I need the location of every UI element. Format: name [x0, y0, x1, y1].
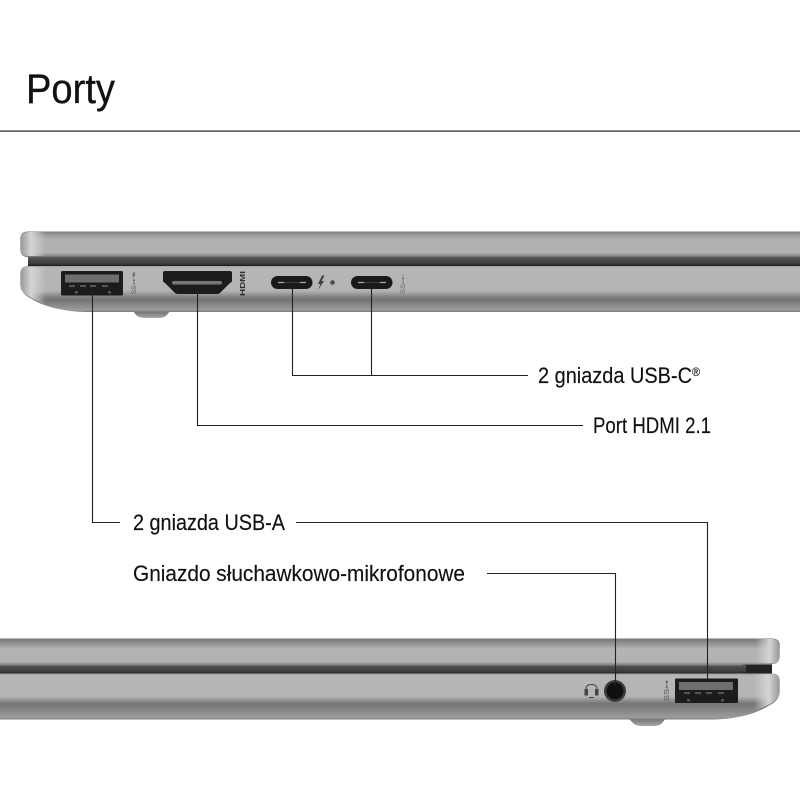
- foot: top laptop: [133, 311, 170, 318]
- USB-A port: right: [675, 678, 738, 703]
- header rule: [0, 130, 800, 132]
- lid corner highlight: bottom laptop: [756, 639, 779, 663]
- icon: Thunderbolt: [318, 276, 324, 290]
- leader lines: USB-C: [292, 289, 528, 376]
- title: Porty: [26, 65, 115, 112]
- status LED: [330, 280, 335, 285]
- label: USB-C: ®: [692, 365, 700, 379]
- hinge gap: bottom laptop: [0, 664, 772, 674]
- leader line: headphone jack: [487, 574, 616, 686]
- lid: bottom laptop: [0, 638, 780, 666]
- USB-A port: left: [61, 271, 123, 296]
- headphone and microphone jack: [604, 680, 626, 702]
- lid corner highlight: top laptop: [21, 232, 46, 256]
- foot: bottom laptop: [628, 718, 666, 726]
- label: USB-C: 2 gniazda USB-C: [538, 363, 708, 388]
- leader line: USB-A right: [296, 522, 708, 680]
- label: headphone jack: Gniazdo słuchawkowo-mikrofonowe: [133, 561, 465, 586]
- leader line: USB-A left: [92, 287, 120, 522]
- label: USB-A: 2 gniazda USB-A: [133, 510, 285, 535]
- USB and charging icons: SS⊶: [131, 279, 138, 294]
- USB icon: bottom laptop: SS⊶: [664, 680, 671, 701]
- leader line: HDMI: [198, 290, 583, 426]
- lid: top laptop: [20, 232, 800, 257]
- base: top laptop: [20, 266, 800, 312]
- bottom laptop, right side view: [0, 638, 780, 726]
- USB-C port: second: [351, 276, 392, 289]
- label: HDMI: Port HDMI 2.1: [593, 413, 711, 438]
- HDMI label: HDMI: [238, 271, 247, 296]
- hinge gap: top laptop: [28, 256, 800, 266]
- base: bottom laptop: [0, 674, 780, 720]
- USB and charging icons: [131, 272, 138, 294]
- base corner highlight: top laptop: [21, 267, 46, 304]
- HDMI port: [163, 271, 232, 294]
- icon: headset: [585, 684, 598, 698]
- top laptop, left side view: [20, 232, 800, 318]
- USB-C port: Thunderbolt: [271, 276, 312, 289]
- USB SS icon: SS⊶◦: [400, 274, 407, 294]
- base corner highlight: bottom laptop: [754, 674, 779, 711]
